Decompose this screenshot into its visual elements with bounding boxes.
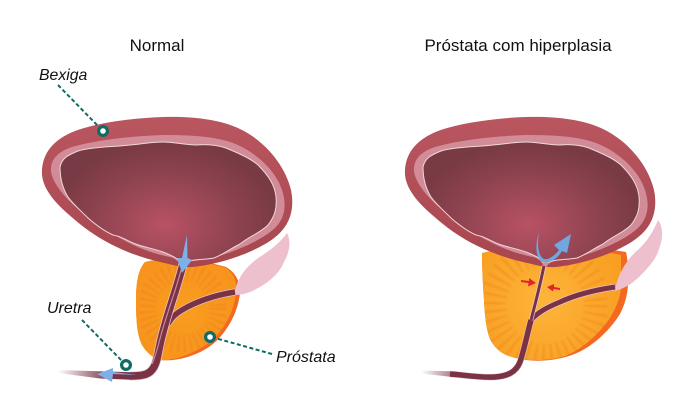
callout: Bexiga xyxy=(39,67,107,135)
arrow: compression from right xyxy=(547,284,560,292)
callout: Próstata xyxy=(206,333,336,366)
arrow: compression from left xyxy=(521,278,536,286)
urethra (normal) xyxy=(58,264,235,380)
urethra (compressed) xyxy=(421,266,615,377)
prostate (normal) xyxy=(136,255,240,360)
callout: Uretra xyxy=(47,300,130,369)
label: Próstata: Próstata xyxy=(276,349,336,366)
title: Próstata com hiperplasia: Próstata com hiperplasia xyxy=(424,36,612,55)
panel: hyperplasia anatomy xyxy=(405,117,662,377)
seminal vesicle (normal) xyxy=(234,233,289,295)
panel: normal anatomy xyxy=(42,117,292,382)
label: Uretra: Uretra xyxy=(47,300,92,317)
seminal vesicle (enlarged) xyxy=(615,220,662,291)
marker: Próstata xyxy=(206,333,214,341)
prostate (enlarged) xyxy=(482,240,628,361)
marker: Uretra xyxy=(122,361,130,369)
bladder (enlarged case) xyxy=(405,117,655,270)
arrow: flow into urethra xyxy=(177,235,192,273)
title: Normal: Normal xyxy=(130,36,184,55)
arrow: blocked flow turning back xyxy=(536,232,571,262)
bladder (normal) xyxy=(42,117,292,270)
arrow: urine leaving urethra xyxy=(97,368,137,382)
marker: Bexiga xyxy=(99,127,107,135)
label: Bexiga: Bexiga xyxy=(39,67,88,84)
